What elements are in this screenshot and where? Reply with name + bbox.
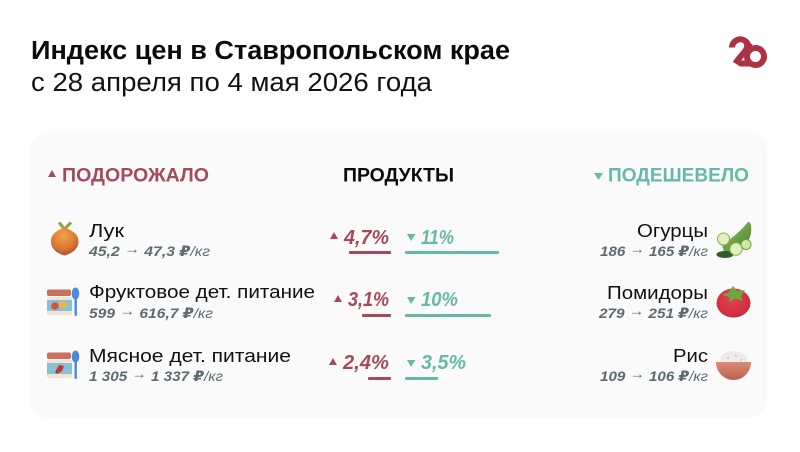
icon: onion [51,222,78,256]
row: fruit baby food: → [119,302,135,318]
row: onion: 45,2 [89,243,116,259]
row: rice: Рис [673,345,708,366]
row: fruit baby food [89,281,315,321]
row: rice: 106 ₽ [645,368,689,384]
icon: fruit baby food jar [47,288,79,316]
panel: price table [30,132,767,418]
row: rice [600,345,708,384]
bar row: fruit food and tomatoes: 10% [421,289,458,311]
row: meat baby food: /кг [203,368,223,384]
row: fruit baby food: Фруктовое дет. питание [89,281,315,302]
bar row: onion and cucumbers: 4,7% [343,227,389,249]
row: meat baby food [89,345,291,384]
row: rice: /кг [688,368,708,384]
icon: tomato [716,286,750,318]
row: meat baby food: Мясное дет. питание [89,345,291,366]
row: tomatoes: /кг [688,305,708,321]
heading: went up: ПОДОРОЖАЛО [62,166,209,186]
subtitle: с 28 апреля по 4 мая 2026 года [31,69,433,97]
row: cucumbers: 186 [600,243,623,259]
row: onion: → [124,240,140,256]
row: meat baby food: → [131,366,147,382]
row: tomatoes [598,282,708,321]
bar row: fruit food and tomatoes: 3,1% [348,289,389,311]
row: cucumbers: Огурцы [637,220,708,241]
row: fruit baby food: 616,7 ₽ [135,305,194,321]
row: fruit baby food: 599 [89,305,112,321]
row: onion: Лук [89,220,125,241]
row: cucumbers [600,220,708,259]
row: meat baby food: 1 305 [89,368,124,384]
row: onion: /кг [189,243,210,259]
row: meat baby food: 1 337 ₽ [147,368,204,384]
heading: went down: ПОДЕШЕВЕЛО [608,166,749,186]
row: tomatoes: 279 [599,305,622,321]
row: tomatoes: 251 ₽ [644,305,689,321]
row: tomatoes: → [629,302,644,318]
bar row: fruit food and tomatoes [334,289,491,317]
icon: meat baby food jar [47,350,79,379]
heading: products: ПРОДУКТЫ [343,166,454,186]
bar row: meat food and rice: 3,5% [421,352,466,374]
row: onion [88,220,210,259]
bar row: meat food and rice [329,352,466,380]
icon: logo 26 [732,39,764,65]
row: cucumbers: /кг [688,243,708,259]
row: fruit baby food: /кг [192,305,213,321]
bar row: meat food and rice: 2,4% [342,352,389,374]
row: tomatoes: Помидоры [607,282,708,303]
icon: cucumber [716,222,751,258]
bar row: onion and cucumbers: 11% [421,227,454,249]
row: cucumbers: → [630,240,645,256]
row: rice: → [630,366,645,382]
row: rice: 109 [600,368,623,384]
title: Индекс цен в Ставропольском крае [31,37,510,65]
bar row: onion and cucumbers [330,227,499,254]
row: onion: 47,3 ₽ [140,243,191,259]
row: cucumbers: 165 ₽ [645,243,689,259]
icon: rice bowl [716,351,751,380]
